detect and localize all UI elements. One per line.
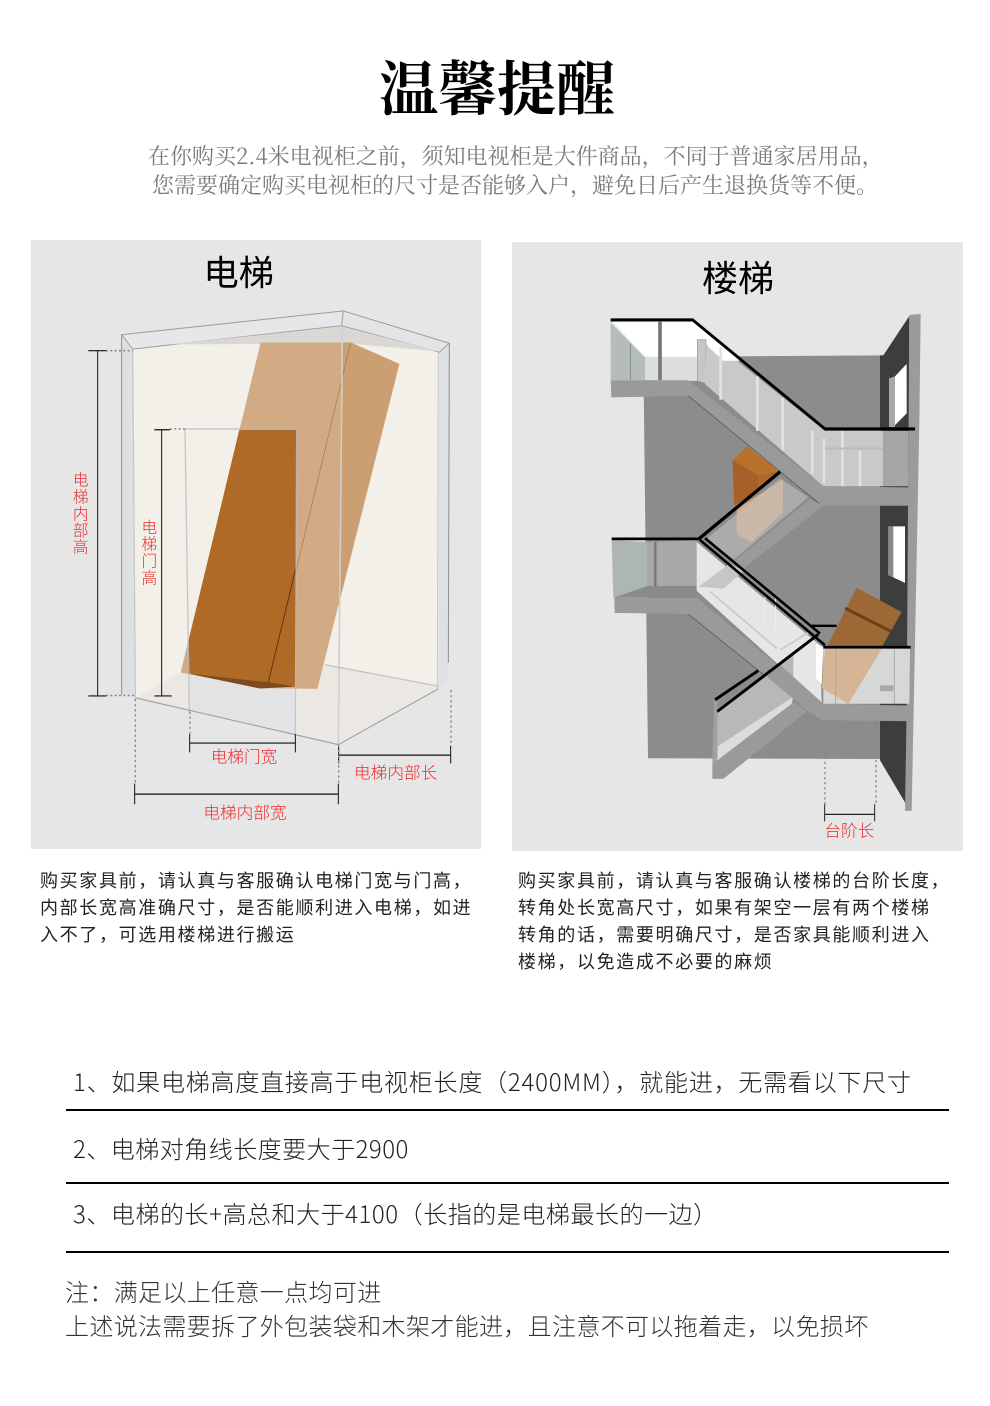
middle flight [612, 472, 910, 721]
label: door width: 电梯门宽 [211, 743, 277, 767]
intro text: 您需要确定购买电视柜的尺寸是否能够入户，避免日后产生退换货等不便。 [152, 169, 878, 200]
heading: stairs: 楼梯 [702, 250, 774, 302]
text: stairs advice [518, 867, 950, 974]
label: interior height: 部 [73, 518, 88, 540]
label: door height: 高 [142, 565, 157, 588]
door frame and cabin edges [122, 327, 449, 745]
text: stairs advice: 转角的话，需要明确尺寸，是否家具能顺利进入 [518, 921, 931, 947]
upper box [733, 447, 783, 542]
text: stairs advice: 转角处长宽高尺寸，如果有架空一层有两个楼梯 [518, 894, 931, 920]
elevator cabin [122, 311, 449, 745]
elevator illustration [88, 311, 451, 804]
text: elevator advice: 内部长宽高准确尺寸，是否能顺利进入电梯，如进 [40, 894, 472, 920]
text: stairs advice: 楼梯，以免造成不必要的麻烦 [518, 948, 773, 974]
rule 3 item: 3、电梯的长+高总和大于4100（长指的是电梯最长的一边） [73, 1195, 718, 1230]
top flight [611, 320, 915, 506]
intro text [148, 140, 884, 200]
rule 2 item: 2、电梯对角线长度要大于2900 [73, 1130, 409, 1165]
side wall with windows [880, 314, 921, 811]
label: step length: 台阶长 [824, 818, 875, 842]
label: interior width: 电梯内部宽 [203, 800, 287, 824]
text: elevator advice: 入不了，可选用楼梯进行搬运 [40, 921, 295, 947]
step length dimension [825, 719, 876, 821]
intro text: 在你购买2.4米电视柜之前，须知电视柜是大件商品，不同于普通家居用品， [148, 140, 884, 171]
label: interior height: 电 [73, 467, 88, 490]
label: interior height: 梯 [73, 484, 88, 507]
panel: stairs diagram [512, 242, 963, 851]
note [65, 1273, 869, 1342]
label: door height: 门 [142, 548, 157, 571]
dimension lines [88, 351, 451, 804]
title: 温馨提醒 [379, 42, 615, 127]
rule 1 item: 1、如果电梯高度直接高于电视柜长度（2400MM），就能进，无需看以下尺寸 [73, 1063, 912, 1098]
panel: elevator diagram [31, 240, 481, 849]
stairs illustration [611, 314, 921, 821]
back wall [643, 355, 884, 759]
bottom flight [712, 634, 823, 779]
label: door height: 电 [142, 514, 157, 538]
text: elevator advice [40, 867, 472, 947]
text: elevator advice: 购买家具前，请认真与客服确认电梯门宽与门高， [40, 867, 472, 893]
label: interior height: 内 [73, 501, 88, 524]
note: 上述说法需要拆了外包装袋和木架才能进，且注意不可以拖着走，以免损坏 [65, 1307, 869, 1342]
text: stairs advice: 购买家具前，请认真与客服确认楼梯的台阶长度， [518, 867, 950, 893]
label: interior length: 电梯内部长 [354, 760, 438, 784]
label: door height: 梯 [142, 531, 157, 554]
note: 注：满足以上任意一点均可进 [65, 1273, 382, 1308]
lower right landing and box [700, 538, 911, 704]
cabinet box [181, 342, 399, 689]
heading: elevator: 电梯 [203, 246, 274, 296]
label: interior height: 高 [73, 534, 88, 557]
